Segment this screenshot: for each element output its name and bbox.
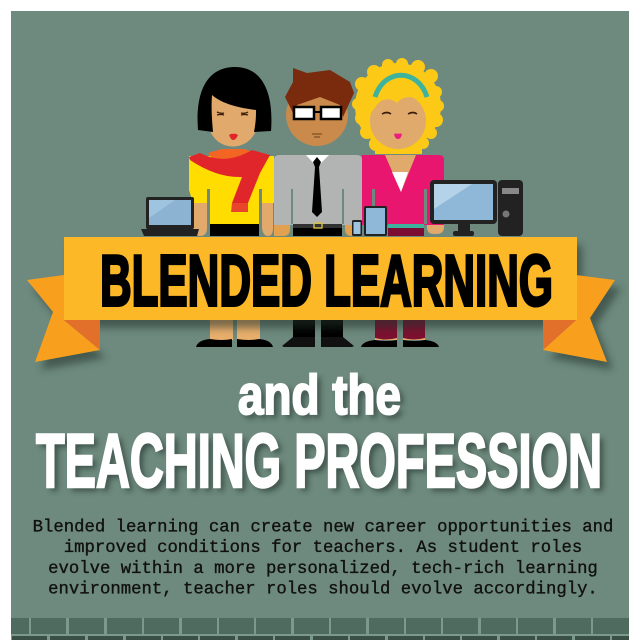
brick wall strip <box>11 618 629 640</box>
intro paragraph <box>33 518 613 600</box>
icon: laptop <box>141 197 199 236</box>
icon: tablet <box>364 206 387 236</box>
legs and shoes of the three characters <box>196 320 439 347</box>
intro paragraph: Blended learning can create new career opportunities and <box>33 518 613 538</box>
icon: desktop computer <box>430 180 523 236</box>
intro paragraph: evolve within a more personalized, tech-rich learning <box>48 560 598 579</box>
character: man with glasses and tie <box>274 68 362 236</box>
intro paragraph: environment, teacher roles should evolve accordingly. <box>48 580 598 600</box>
intro paragraph: improved conditions for teachers. As student roles <box>64 539 582 558</box>
banner ribbon <box>27 237 621 370</box>
heading: and the: and the <box>242 367 405 430</box>
character: woman with black bob and red scarf <box>189 67 274 236</box>
character: woman with curly blonde hair <box>352 58 444 236</box>
icon: smartphone <box>352 220 362 236</box>
heading: and the: and the <box>238 363 401 426</box>
